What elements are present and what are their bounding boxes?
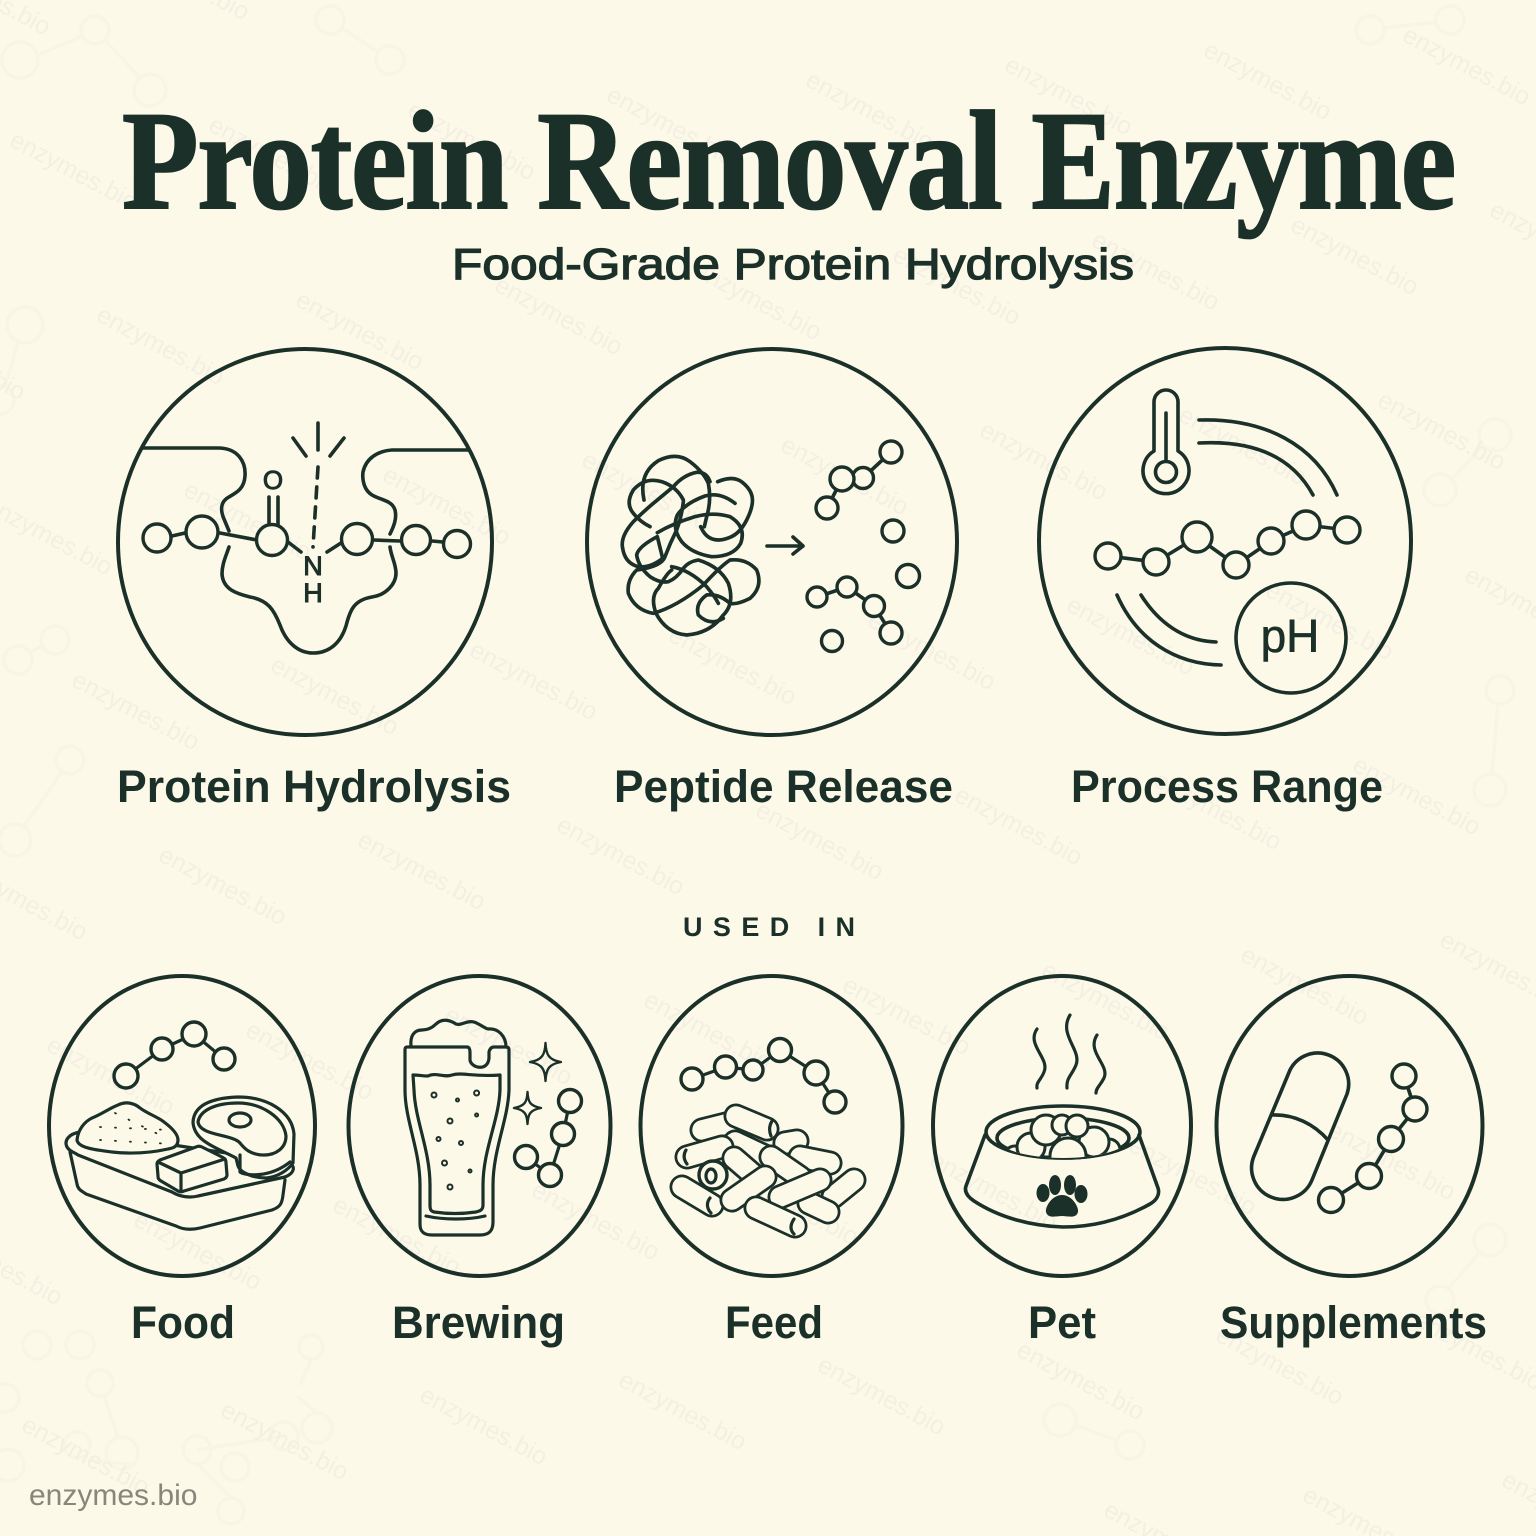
- text: enzymes.bio: [403, 96, 540, 186]
- cleavage burst: [293, 423, 344, 547]
- text: enzymes.bio: [838, 971, 975, 1061]
- peptide chain: [514, 1090, 582, 1186]
- text: enzymes.bio: [726, 1161, 863, 1251]
- text: enzymes.bio: [813, 1351, 950, 1441]
- text: enzymes.bio: [490, 271, 627, 361]
- text: enzymes.bio: [1211, 1321, 1348, 1411]
- text: enzymes.bio: [863, 606, 1000, 696]
- label: food: Food: [131, 1297, 235, 1348]
- peptides: [807, 441, 920, 652]
- text: enzymes.bio: [266, 651, 403, 741]
- text: enzymes.bio: [42, 1031, 179, 1121]
- text: enzymes.bio: [5, 126, 142, 216]
- icon: beer glass: [405, 1020, 509, 1235]
- text: enzymes.bio: [664, 621, 801, 711]
- icon: capsule: [1252, 1053, 1349, 1199]
- text: enzymes.bio: [1037, 956, 1174, 1046]
- text: enzymes.bio: [1087, 226, 1224, 316]
- text: enzymes.bio: [751, 796, 888, 886]
- text: enzymes.bio: [129, 1206, 266, 1296]
- text: enzymes.bio: [1012, 1336, 1149, 1426]
- text: enzymes.bio: [614, 1366, 751, 1456]
- text: enzymes.bio: [888, 241, 1025, 331]
- temperature arcs: [1199, 420, 1337, 495]
- text: enzymes.bio: [378, 461, 515, 551]
- panel: feed: [640, 976, 902, 1276]
- text: enzymes.bio: [950, 781, 1087, 871]
- peptide chain: [681, 1038, 846, 1113]
- text: enzymes.bio: [1261, 576, 1398, 666]
- text: enzymes.bio: [1124, 1131, 1261, 1221]
- icon: pet bowl: [965, 1106, 1159, 1227]
- text: enzymes.bio: [328, 1191, 465, 1281]
- panel: food: [49, 976, 315, 1276]
- text: enzymes.bio: [415, 1381, 552, 1471]
- text: enzymes.bio: [291, 286, 428, 376]
- text: enzymes.bio: [1323, 1116, 1460, 1206]
- label: peptide release: Peptide Release: [614, 761, 953, 812]
- panel: process range: [1039, 348, 1411, 734]
- peptide chain with bond cleavage: H: [303, 578, 323, 608]
- peptide chain with bond cleavage: N: [303, 551, 323, 581]
- label: brewing: Brewing: [392, 1297, 565, 1348]
- text: enzymes.bio: [1174, 401, 1311, 491]
- text: enzymes.bio: [92, 301, 229, 391]
- text: enzymes.bio: [527, 1176, 664, 1266]
- label: supplements: Supplements: [1220, 1297, 1487, 1348]
- arrow: [767, 537, 803, 554]
- tangled protein: [622, 456, 759, 635]
- panel: peptide release: [587, 349, 957, 735]
- peptide chain: [1318, 1064, 1427, 1212]
- text: enzymes.bio: [1149, 766, 1286, 856]
- text: enzymes.bio: [552, 811, 689, 901]
- text: enzymes.bio: [577, 446, 714, 536]
- text: enzymes.bio: [801, 66, 938, 156]
- peptide chain with bond cleavage: O: [263, 465, 283, 495]
- text: enzymes.bio: [689, 256, 826, 346]
- panel: supplements: [1216, 976, 1482, 1276]
- text: enzymes.bio: [440, 1001, 577, 1091]
- text: enzymes.bio: [602, 81, 739, 171]
- text: enzymes.bio: [179, 476, 316, 566]
- text: enzymes.bio: [1348, 751, 1485, 841]
- icon: pH badge: [1236, 583, 1346, 693]
- text: enzymes.bio: [353, 826, 490, 916]
- icon: food tray: [66, 1097, 294, 1229]
- text: enzymes.bio: [154, 841, 291, 931]
- text: enzymes.bio: [465, 636, 602, 726]
- peptide chain with bond cleavage: [143, 465, 470, 608]
- peptide chain: [1095, 511, 1360, 578]
- text: enzymes.bio: [1398, 21, 1535, 111]
- subtitle: Food-Grade Protein Hydrolysis: [452, 240, 1134, 289]
- panel: protein hydrolysis: [118, 349, 492, 735]
- text: enzymes.bio: [216, 1396, 353, 1486]
- text: enzymes.bio: [1236, 941, 1373, 1031]
- text: enzymes.bio: [1199, 36, 1336, 126]
- icon: sparkles: [514, 1043, 561, 1124]
- text: enzymes.bio: [1286, 211, 1423, 301]
- label: pet: Pet: [1028, 1297, 1096, 1348]
- icon: thermometer: [1143, 390, 1189, 494]
- icon: steam: [1034, 1015, 1105, 1093]
- section heading: used in: USED IN: [683, 912, 855, 942]
- label: feed: Feed: [725, 1297, 823, 1348]
- label: protein hydrolysis: Protein Hydrolysis: [117, 761, 511, 812]
- peptide chain: [114, 1022, 235, 1088]
- text: enzymes.bio: [1373, 386, 1510, 476]
- icon: feed pellets: [682, 1116, 854, 1234]
- text: enzymes.bio: [204, 111, 341, 201]
- label: process range: Process Range: [1071, 761, 1383, 812]
- text: enzymes.bio: [241, 1016, 378, 1106]
- text: enzymes.bio: [67, 666, 204, 756]
- enzyme pocket outline: [143, 448, 468, 653]
- text: enzymes.bio: [776, 431, 913, 521]
- pH arcs: [1117, 595, 1221, 665]
- text: enzymes.bio: [1062, 591, 1199, 681]
- panel: brewing: [348, 976, 610, 1276]
- icon: pH badge: pH: [1261, 610, 1319, 662]
- panel: pet: [933, 976, 1191, 1276]
- text: enzymes.bio: [639, 986, 776, 1076]
- text: enzymes.bio: [925, 1146, 1062, 1236]
- icon: paw print: [1036, 1175, 1088, 1217]
- text: enzymes.bio: [17, 1411, 154, 1501]
- text: enzymes.bio: [975, 416, 1112, 506]
- footer brand: enzymes.bio: [29, 1479, 197, 1512]
- text: enzymes.bio: [1000, 51, 1137, 141]
